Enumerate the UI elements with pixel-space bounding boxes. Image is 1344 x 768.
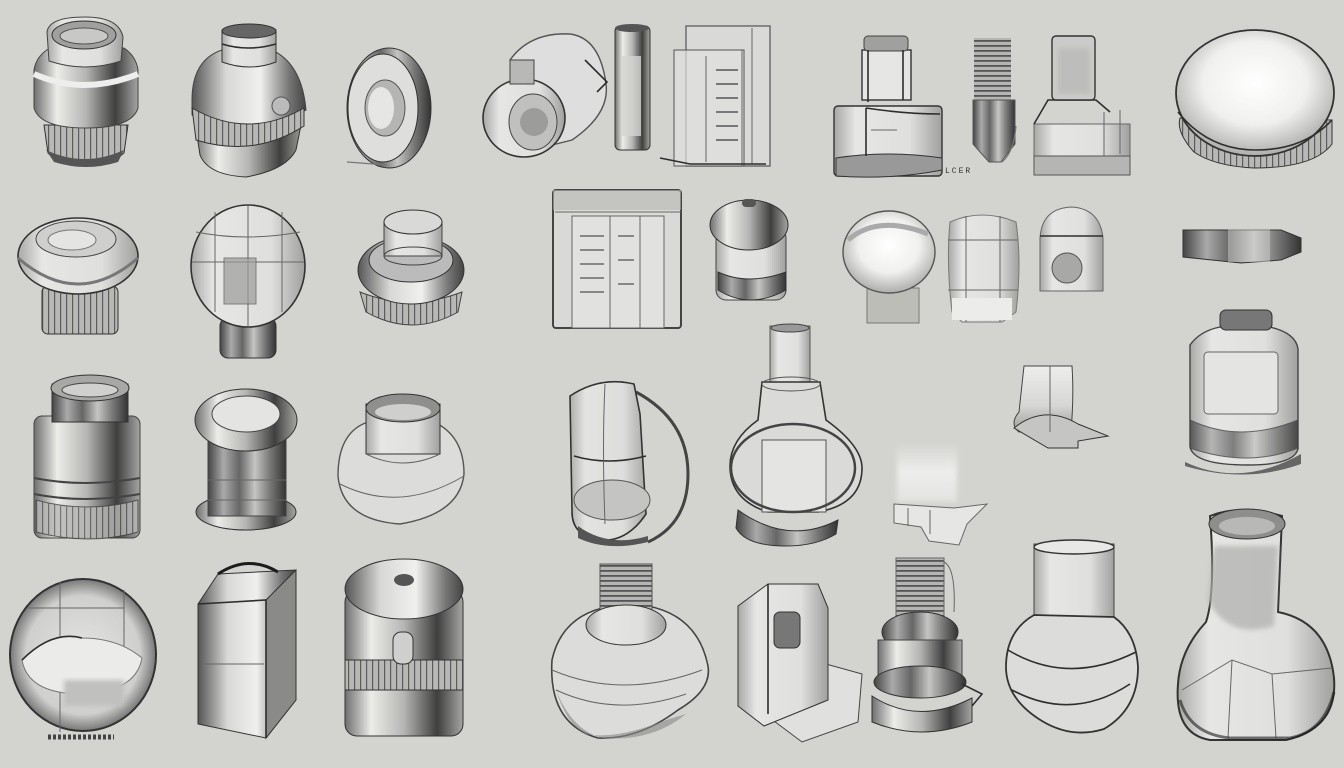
small metal can <box>710 199 788 300</box>
banded metal can <box>345 559 463 736</box>
label: LCER: LCER <box>945 167 972 176</box>
white dome on block <box>843 211 935 323</box>
faded small cup <box>894 442 987 545</box>
glass pitcher <box>570 382 688 546</box>
glass sphere <box>10 579 156 737</box>
glass flask <box>730 324 862 546</box>
dome cap block <box>1040 207 1103 291</box>
threaded bolt <box>973 38 1016 162</box>
metal jar lower left <box>34 375 140 539</box>
big glass jar right <box>1185 310 1301 475</box>
threaded jug <box>552 564 708 738</box>
spool <box>195 389 297 530</box>
glass stack vessel <box>1034 36 1130 175</box>
threaded stack <box>872 558 982 732</box>
jar with ribbed base <box>34 17 138 167</box>
large white dome <box>1176 30 1334 168</box>
translucent barrel <box>948 215 1019 322</box>
tall glass tube <box>615 24 650 150</box>
ring lens <box>347 48 431 168</box>
transparent ruled box <box>553 190 681 328</box>
large glass bottle <box>1178 509 1334 740</box>
machine-like vessel <box>738 584 862 742</box>
metal bottle with band <box>192 24 306 177</box>
glass bulb <box>191 205 305 358</box>
wide lid on ribbed base <box>18 218 138 334</box>
metal box <box>198 563 296 738</box>
small horizontal tube <box>1183 228 1301 263</box>
glass lamp <box>483 34 607 157</box>
glass jar with lid ring <box>338 394 464 524</box>
ring stack jar <box>358 210 464 325</box>
glass stack jar <box>834 36 942 177</box>
glass bulb jar <box>1006 540 1138 733</box>
transparent box <box>660 26 770 166</box>
small glass cup <box>1014 366 1108 448</box>
